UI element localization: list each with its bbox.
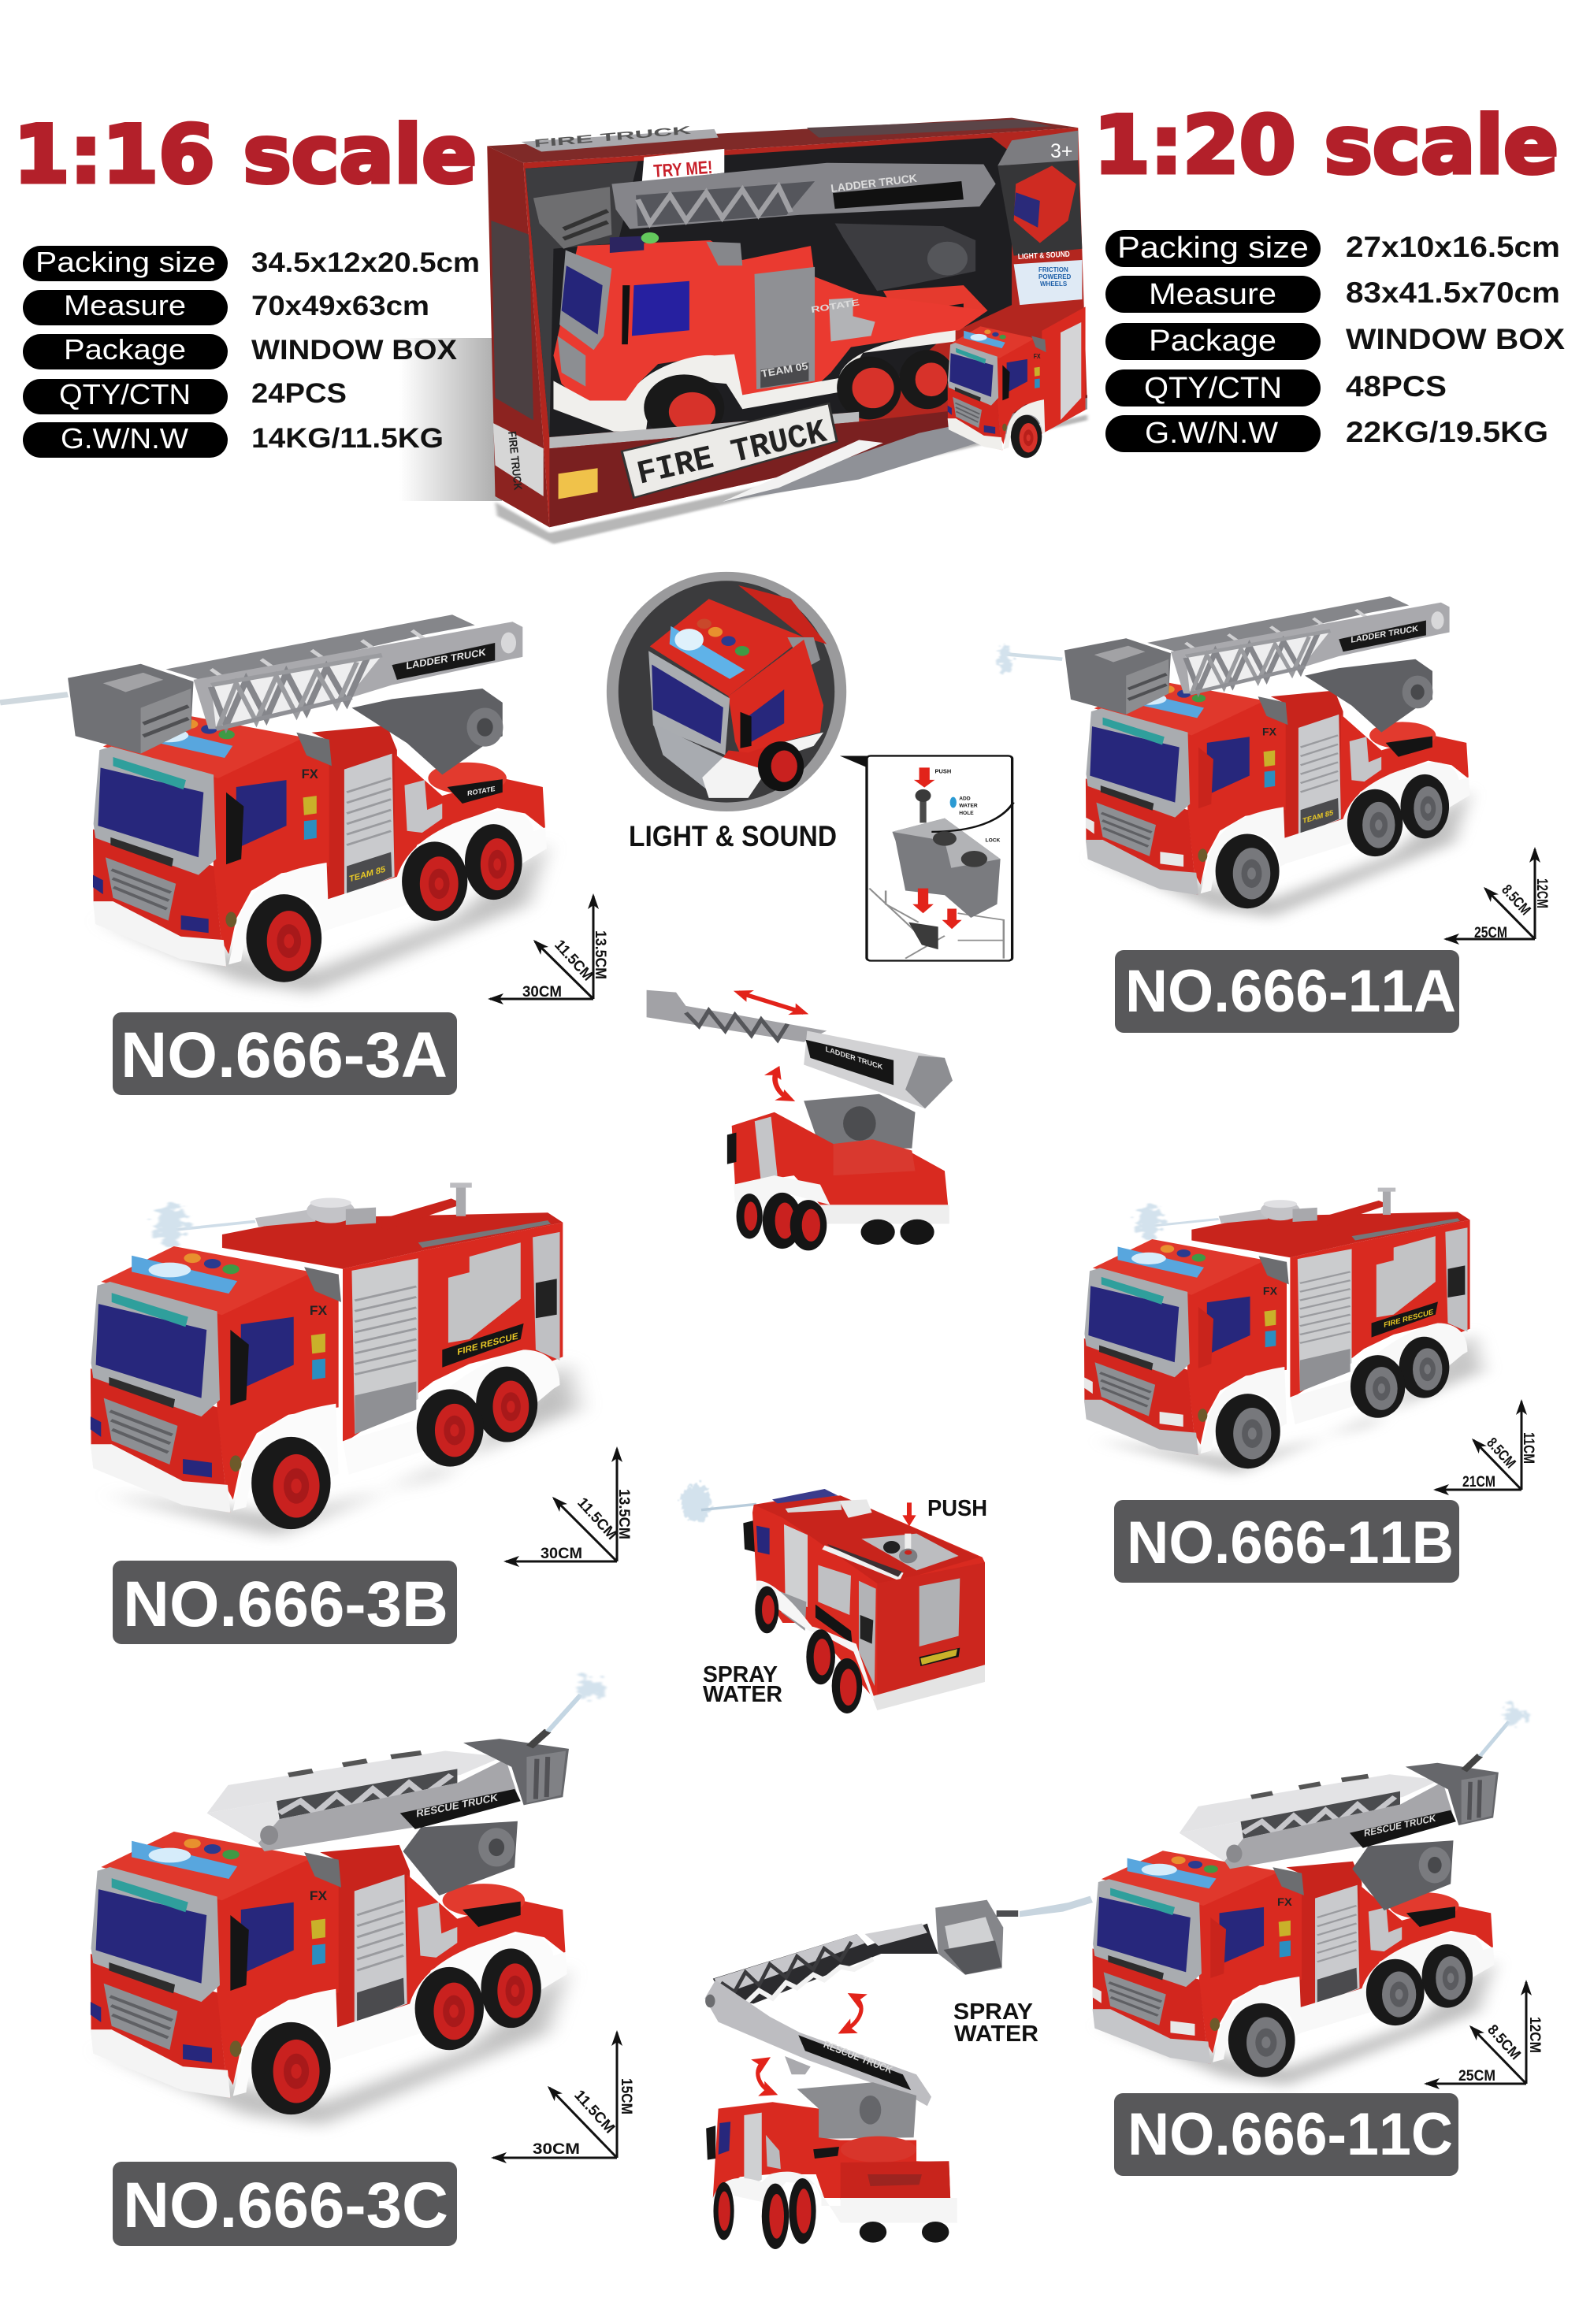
callout: water tank diagram: WATER: [959, 803, 978, 808]
label: PUSH: PUSH: [927, 1496, 987, 1521]
truck: NO.666-3A: [0, 614, 548, 993]
spec table: 1:16 scale: 14KG/11.5KG: [251, 423, 444, 454]
label: SPRAY WATER 2: SPRAY: [953, 1999, 1033, 2025]
spec table: 1:20 scale: [1105, 230, 1565, 452]
label: SPRAY WATER: SPRAY: [703, 1662, 778, 1687]
label: SPRAY WATER 2: WATER: [954, 2021, 1038, 2047]
small water truck on box: [948, 306, 1086, 458]
dimensions: 666-11A: 25CM: [1474, 925, 1507, 941]
dimensions: 666-11C: 25CM: [1458, 2068, 1495, 2085]
spec table: 1:20 scale: 27x10x16.5cm: [1346, 231, 1560, 263]
truck: NO.666-11C: [1093, 1705, 1525, 2086]
dimensions: 666-3A: 11.5CM: [551, 937, 596, 984]
spec table: 1:20 scale: Measure: [1149, 278, 1276, 311]
spec table: 1:20 scale: 48PCS: [1346, 370, 1447, 403]
dimensions: 666-3A: [490, 896, 608, 1001]
spec table: 1:16 scale: 70x49x63cm: [251, 291, 429, 321]
dimensions: 666-3C: 30CM: [533, 2141, 580, 2158]
spec table: 1:20 scale: 22KG/19.5KG: [1346, 416, 1548, 448]
callout: water tank diagram: [840, 755, 1013, 960]
title: 1:16 scale: 1:16 scale: [13, 108, 477, 201]
rear view truck with raised ladder: [647, 990, 953, 1250]
dimensions: 666-3C: 15CM: [618, 2078, 634, 2114]
box text: FRICTION: [1038, 266, 1068, 273]
label: light and sound: LIGHT & SOUND: [629, 820, 837, 852]
box text: 3+: [1050, 140, 1073, 162]
dimensions: 666-3B: 13.5CM: [615, 1489, 632, 1539]
box text: FIRE TRUCK: [505, 431, 524, 491]
shadow behind product box: [399, 338, 502, 501]
spec table: 1:16 scale: 34.5x12x20.5cm: [251, 247, 480, 278]
spec table: 1:20 scale: G.W/N.W: [1145, 417, 1278, 450]
spec table: 1:16 scale: Packing size: [35, 246, 216, 278]
dimensions: 666-3B: 30CM: [541, 1546, 582, 1562]
rear view truck with raised ladder: LADDER TRUCK: [826, 1045, 882, 1071]
truck: NO.666-3C: [91, 1676, 604, 2125]
model badge: NO.666-3A: NO.666-3A: [121, 1019, 448, 1091]
light and sound circular inset: [607, 572, 846, 811]
box text: FIRE TRUCK: [633, 414, 830, 494]
truck: NO.666-3B: [91, 1182, 578, 1536]
dimensions: 666-11B: 8.5CM: [1483, 1435, 1518, 1472]
spec table: 1:16 scale: 24PCS: [251, 378, 347, 409]
dimensions: 666-3A: 13.5CM: [592, 930, 608, 979]
dimensions: 666-11C: 12CM: [1526, 2017, 1543, 2053]
spec table: 1:16 scale: QTY/CTN: [59, 378, 191, 410]
model badge: NO.666-11C: NO.666-11C: [1128, 2101, 1453, 2168]
spec table: 1:16 scale: G.W/N.W: [61, 422, 188, 455]
box text: LADDER TRUCK: [830, 172, 918, 195]
spec table: 1:16 scale: [23, 246, 480, 458]
title: 1:20 scale: 1:20 scale: [1094, 98, 1559, 191]
dimensions: 666-11A: [1446, 849, 1550, 941]
model badge: NO.666-11B: NO.666-11B: [1127, 1509, 1454, 1576]
spec table: 1:16 scale: WINDOW BOX: [251, 335, 458, 366]
dimensions: 666-3C: 11.5CM: [570, 2087, 618, 2137]
label: SPRAY WATER: WATER: [703, 1682, 782, 1707]
box text: WHEELS: [1040, 280, 1068, 288]
model badge: NO.666-3C: NO.666-3C: [123, 2170, 448, 2241]
spec table: 1:20 scale: WINDOW BOX: [1346, 323, 1565, 355]
product box packaging: [487, 118, 1087, 544]
box text: LIGHT & SOUND: [1018, 251, 1070, 262]
spec table: 1:16 scale: Measure: [64, 289, 186, 321]
box text: ROTATE: [811, 298, 860, 315]
dimensions: 666-3B: [506, 1449, 632, 1562]
truck: NO.666-11B: [1084, 1188, 1482, 1474]
box text: [505, 124, 1073, 494]
dimensions: 666-3B: 11.5CM: [574, 1494, 620, 1543]
dimensions: 666-11B: 21CM: [1462, 1474, 1495, 1491]
rear view truck spraying water: [682, 1483, 985, 1713]
spec table: 1:20 scale: Packing size: [1117, 232, 1309, 265]
dimensions: 666-11B: 11CM: [1520, 1432, 1536, 1464]
truck: NO.666-11A: [999, 596, 1471, 918]
model badge: NO.666-11A: NO.666-11A: [1125, 958, 1456, 1025]
rear view truck with extended rescue ladder: [704, 1896, 1093, 2249]
callout: water tank diagram: PUSH: [934, 767, 951, 774]
label: SPRAY WATER 2: [953, 1999, 1038, 2047]
model badge: NO.666-3B: NO.666-3B: [123, 1569, 448, 1640]
truck: NO.666-3A: ROTATE: [467, 785, 496, 797]
callout: water tank diagram: HOLE: [959, 811, 974, 816]
spec table: 1:16 scale: Package: [64, 333, 186, 366]
spec table: 1:20 scale: QTY/CTN: [1144, 372, 1282, 405]
dimensions: 666-3A: 30CM: [522, 984, 562, 1001]
callout: water tank diagram: LOCK: [986, 838, 1001, 844]
rear view truck with extended rescue ladder: RESCUE TRUCK: [822, 2038, 895, 2076]
dimensions: 666-11B: [1436, 1401, 1536, 1491]
dimensions: 666-11C: 8.5CM: [1484, 2021, 1524, 2063]
dimensions: 666-11C: [1426, 1982, 1543, 2085]
dimensions: 666-11A: 8.5CM: [1498, 882, 1533, 919]
dimensions: 666-3C: [493, 2033, 634, 2158]
box text: TRY ME!: [653, 157, 713, 181]
truck: NO.666-3A: TEAM 85: [349, 865, 385, 884]
spec table: 1:20 scale: Package: [1149, 325, 1276, 358]
callout: water tank diagram: ADD: [959, 796, 971, 802]
spec table: 1:20 scale: 83x41.5x70cm: [1346, 277, 1560, 309]
label: SPRAY WATER: [703, 1662, 782, 1707]
box text: TEAM 05: [760, 360, 809, 380]
box text: POWERED: [1038, 273, 1072, 280]
dimensions: 666-11A: 12CM: [1533, 878, 1550, 908]
box text: FIRE TRUCK: [533, 124, 692, 150]
truck: NO.666-11A: TEAM 85: [1302, 808, 1333, 826]
